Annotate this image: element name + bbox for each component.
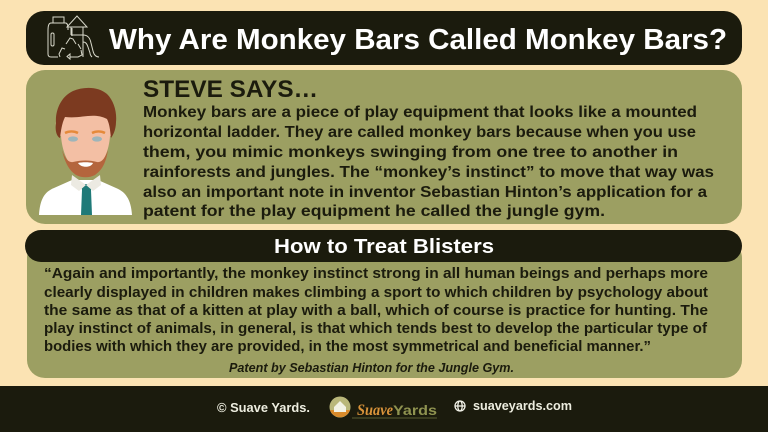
heading bar: How to Treat Blisters: How to Treat Blisters	[274, 236, 494, 258]
icon: globe	[455, 401, 465, 411]
text block: explanation: rainforests and jungles. The “monkey’s instinct” to move that way was	[143, 164, 714, 181]
text block: explanation: them, you mimic monkeys swinging from one tree to another in	[143, 144, 678, 161]
text block: explanation: horizontal ladder. They are called monkey bars because when you use	[143, 124, 696, 141]
copyright: © Suave Yards.	[217, 401, 310, 415]
text block: explanation: patent for the play equipment he called the jungle gym.	[143, 203, 605, 220]
website: suaveyards.com	[473, 399, 572, 413]
text block: explanation: Monkey bars are a piece of play equipment that looks like a mounted	[143, 104, 697, 121]
icon: Steve avatar	[39, 88, 132, 215]
logo: Suave Yards: Yards	[393, 402, 437, 418]
attribution: Patent by Sebastian Hinton for the Jungle Gym.	[229, 360, 514, 375]
text block: patent quote: clearly displayed in children makes climbing a sport to which children by psychology about	[44, 284, 708, 301]
logo: Suave Yards	[330, 396, 437, 419]
footer	[0, 386, 768, 432]
panel: Steve says	[26, 70, 742, 224]
text block: patent quote: bodies with which they are provided, in the most symmetrical and beneficial manner.”	[44, 338, 651, 355]
text block: explanation	[143, 104, 714, 220]
text block: explanation: also an important note in inventor Sebastian Hinton’s application for a	[143, 184, 707, 201]
title banner	[26, 11, 742, 65]
title text: Why Are Monkey Bars Called Monkey Bars?	[109, 24, 727, 56]
text block: patent quote: the same as that of a kitten at play with a ball, which of course is practice for hunting. The	[44, 302, 708, 319]
panel: quote	[25, 230, 742, 378]
text block: patent quote	[44, 265, 708, 355]
heading bar: How to Treat Blisters	[25, 230, 742, 262]
text block: patent quote: “Again and importantly, the monkey instinct strong in all human beings and perhaps more	[44, 265, 708, 282]
heading: Steve says: STEVE SAYS…	[143, 76, 318, 103]
logo: Suave Yards: Suave	[357, 402, 393, 419]
text block: patent quote: play instinct of animals, in general, is that which tends best to develop the particular type of	[44, 320, 708, 337]
icon: playground and recycling	[48, 16, 99, 59]
